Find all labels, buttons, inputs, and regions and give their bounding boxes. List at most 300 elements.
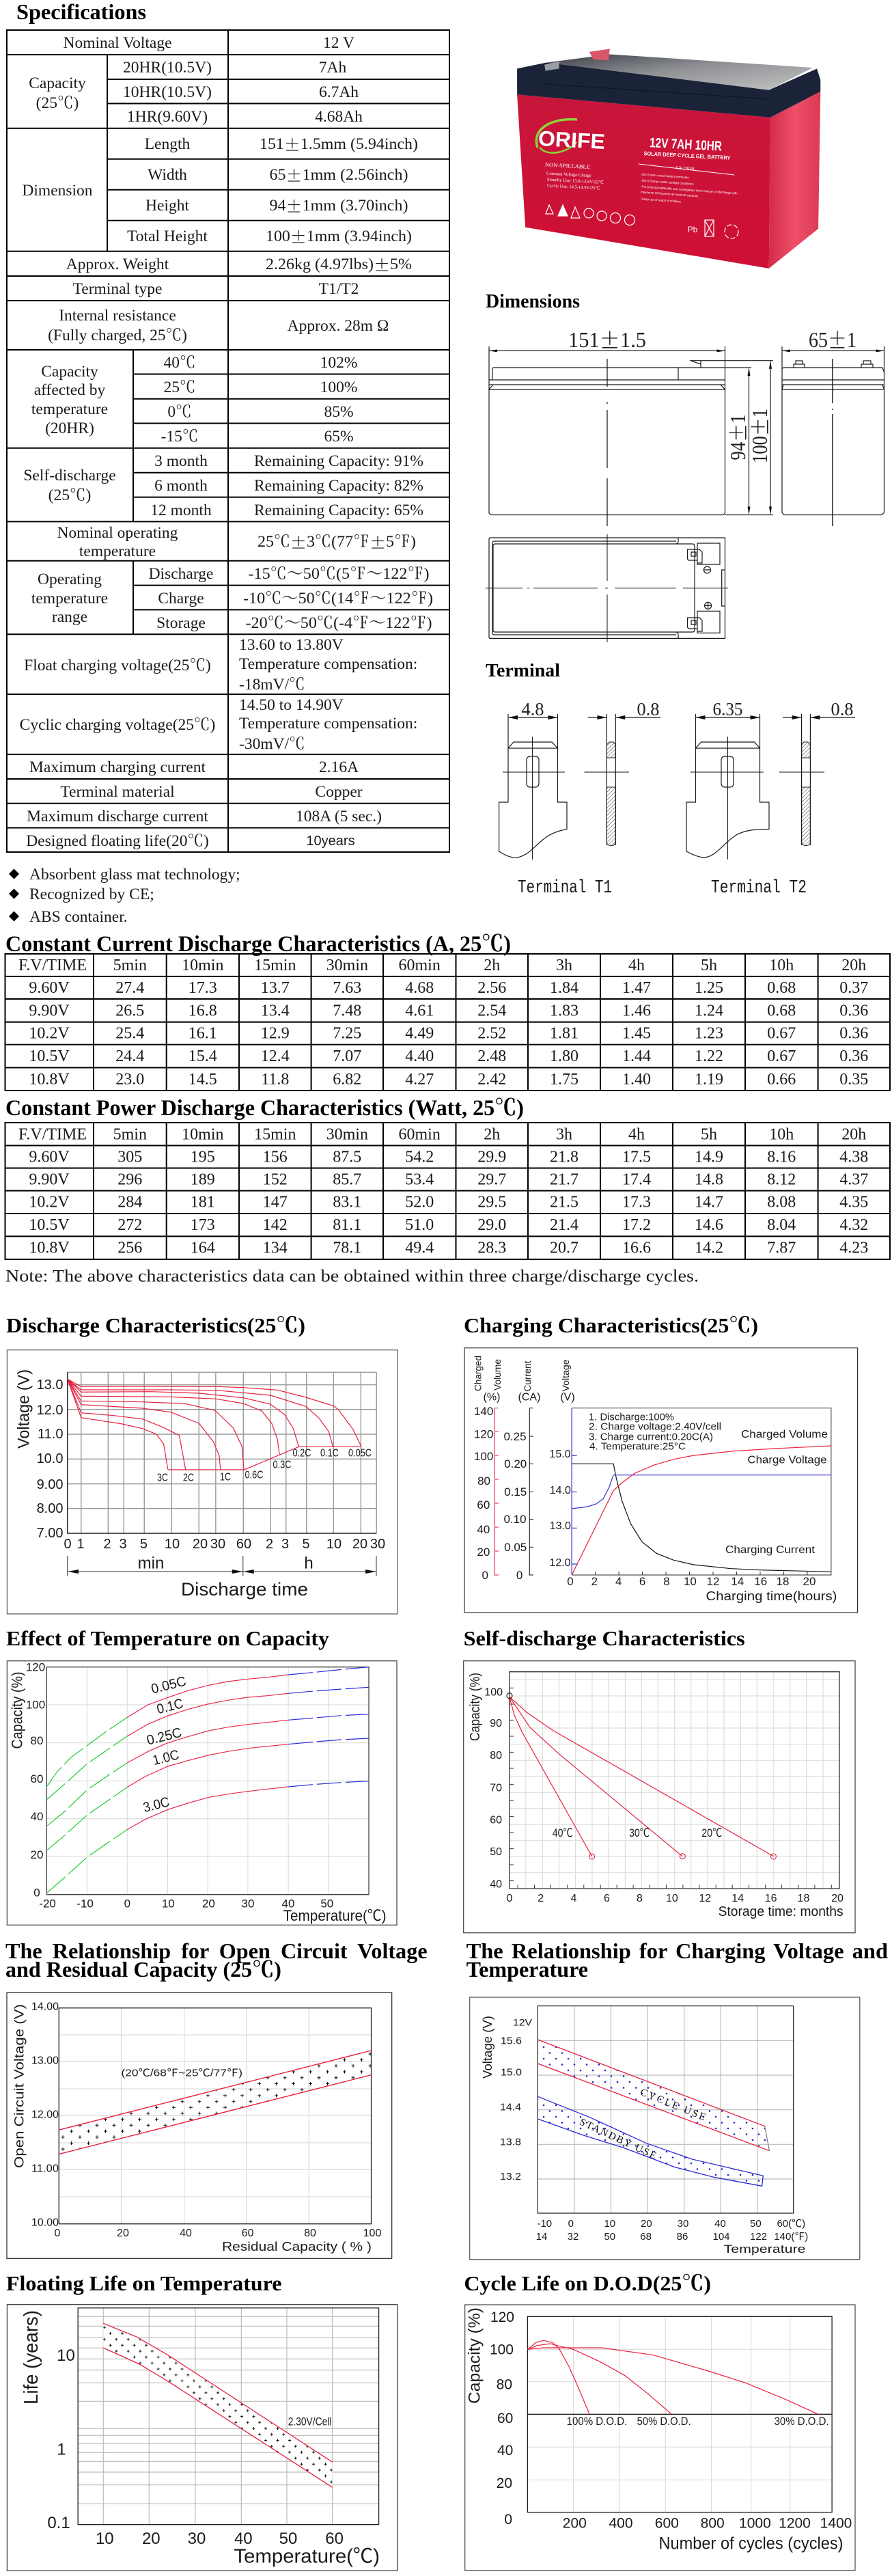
axis labels: 60 — [497, 2411, 513, 2426]
axis labels: 15.6 — [501, 2035, 522, 2047]
axis labels: 30 — [188, 2530, 206, 2547]
drawing: battery top view — [486, 534, 728, 642]
battery label text: CAUTION — [675, 166, 695, 172]
left axis labels: 13.0 — [550, 1520, 571, 1532]
axis labels: 20 — [202, 1897, 215, 1910]
table: constant power discharge: 2h — [484, 1126, 500, 1144]
table: constant current discharge: 2.54 — [477, 1002, 506, 1019]
axis labels: 0 — [506, 1893, 512, 1904]
left axis labels: 14.0 — [550, 1485, 571, 1496]
table: constant current discharge — [5, 954, 890, 1091]
table: constant power discharge: 15min — [254, 1126, 296, 1144]
table: specifications: Width — [148, 166, 187, 184]
table: constant power discharge: 14.8 — [695, 1171, 723, 1189]
x axis labels: 3 — [119, 1537, 127, 1552]
table: specifications: 85% — [324, 403, 354, 421]
table: constant current discharge: 1.83 — [550, 1002, 579, 1019]
left axis labels: 0.20 — [504, 1457, 527, 1470]
table: constant current discharge: 1.45 — [622, 1025, 651, 1043]
table: constant current discharge: 3h — [556, 957, 572, 974]
axis labels: 8 — [637, 1893, 643, 1904]
axis labels: 70 — [490, 1782, 502, 1794]
table: constant power discharge: 8.12 — [767, 1171, 796, 1189]
axis labels: 12.00 — [31, 2109, 59, 2121]
table: specifications: 12 V — [323, 34, 354, 52]
x axis labels: min — [138, 1554, 164, 1573]
x axis labels: 2 — [591, 1574, 598, 1588]
heading: open circuit voltage and residual capacity — [5, 1938, 428, 1982]
x axis labels: 10 — [165, 1537, 180, 1552]
table: constant current discharge: 60min — [399, 957, 441, 974]
axis labels — [20, 2310, 380, 2568]
curve labels: 2C — [183, 1472, 194, 1484]
table: specifications: 40℃ — [164, 354, 195, 372]
table: constant current discharge: 15min — [254, 957, 296, 974]
heading: Self-discharge Characteristics: Self-discharge Characteristics — [464, 1626, 745, 1650]
axis labels: 30 — [242, 1897, 254, 1910]
axis labels: 50 — [750, 2218, 762, 2229]
table: constant power discharge: 8.16 — [767, 1148, 796, 1166]
table: constant power discharge: 256 — [117, 1239, 142, 1257]
table: specifications: -18mV/℃ — [239, 676, 305, 694]
y axis labels: 13.0 — [37, 1378, 63, 1393]
x axis labels: 10 — [326, 1537, 342, 1552]
heading: Charging Characteristics: Charging Characteristics(25℃) — [464, 1313, 758, 1337]
heading: Specifications: Specifications — [16, 0, 146, 24]
cycle use band — [538, 2040, 769, 2151]
table: specifications: Cyclic charging voltage(25℃) — [20, 716, 215, 734]
table: specifications: Terminal type — [73, 280, 162, 298]
table: constant current discharge: 6.82 — [333, 1071, 361, 1088]
axis labels: 140(℉) — [774, 2230, 808, 2243]
axis labels: 14.4 — [500, 2102, 521, 2113]
table: constant current discharge: 0.68 — [767, 979, 796, 997]
temperature labels: 40℃ — [553, 1826, 573, 1839]
axis labels: 80 — [304, 2228, 316, 2238]
axis labels — [466, 2307, 852, 2553]
left axis labels: 0.15 — [504, 1485, 527, 1498]
x axis labels: 12 — [707, 1574, 719, 1588]
table: constant current discharge: 4h — [628, 957, 645, 974]
table: constant power discharge: 14.7 — [695, 1193, 723, 1211]
table: constant power discharge: 4.32 — [839, 1216, 868, 1234]
left axis labels: 40 — [477, 1523, 490, 1536]
table: constant current discharge: 7.48 — [333, 1002, 361, 1019]
left axis labels: 15.0 — [549, 1449, 571, 1460]
table: constant current discharge: 4.61 — [405, 1002, 434, 1019]
axis labels: 104 — [712, 2230, 730, 2243]
table: specifications: temperature — [31, 400, 108, 418]
table: constant power discharge: 7.87 — [767, 1239, 796, 1257]
table: specifications: 10years — [306, 834, 355, 849]
axis labels: 4 — [571, 1893, 577, 1904]
standby use band: STANDBY USE — [578, 2117, 658, 2162]
axis labels: 10 — [96, 2530, 114, 2547]
battery label text: Constant Voltage Charge — [546, 172, 591, 178]
table: specifications: Approx. 28m Ω — [288, 317, 389, 335]
feature bullet list: Absorbent glass mat technology; — [29, 866, 240, 883]
table: constant current discharge: 4.68 — [405, 979, 434, 997]
axis titles — [473, 1356, 575, 1403]
table: specifications: 102% — [320, 354, 357, 372]
dimension: height labels: 100±1 — [744, 409, 775, 463]
test condition notes: 3. Charge current:0.20C(A) — [589, 1431, 713, 1442]
axis labels: 20 — [497, 2476, 512, 2491]
table: specifications: Temperature compensation: — [239, 655, 417, 673]
table: constant power discharge: 8.08 — [767, 1193, 796, 1211]
left axis labels: 0 — [516, 1569, 522, 1582]
dimension: 4.8: 4.8 — [522, 700, 544, 719]
axis labels: 0.1 — [47, 2514, 70, 2532]
heading: Cycle Life on D.O.D: Cycle Life on D.O.D(25℃) — [464, 2271, 711, 2295]
table: constant current discharge: 27.4 — [115, 979, 144, 997]
x axis labels: 5 — [302, 1537, 310, 1552]
table: constant current discharge: 1.23 — [695, 1025, 723, 1043]
drawing: terminal T1 — [499, 700, 660, 899]
axis labels: 14 — [536, 2230, 547, 2243]
x axis labels: 6 — [639, 1574, 645, 1588]
table: specifications: Float charging voltage(25℃) — [24, 657, 211, 674]
table: constant current discharge: 11.8 — [261, 1071, 289, 1088]
x axis labels: Charging time(hours) — [706, 1589, 837, 1603]
table: constant power discharge: 173 — [191, 1216, 215, 1234]
table: constant power discharge: 83.1 — [333, 1193, 361, 1211]
axis labels: 100 — [26, 1699, 45, 1711]
axis labels: 13.2 — [500, 2171, 521, 2182]
charging current curve — [572, 1464, 831, 1572]
chart: discharge characteristics — [7, 1350, 398, 1614]
left axis labels: 100 — [474, 1450, 493, 1463]
axis labels: 1 — [57, 2441, 66, 2458]
x axis labels: 60 — [236, 1537, 251, 1552]
D.O.D labels: 50% D.O.D. — [637, 2415, 691, 2428]
axis labels: 20 — [117, 2228, 129, 2238]
x axis labels: 0 — [64, 1537, 72, 1552]
table: constant power discharge: 305 — [117, 1148, 142, 1166]
table: constant power discharge: 17.3 — [622, 1193, 651, 1211]
table: specifications: 14.50 to 14.90V — [239, 696, 344, 714]
test condition notes: 2. Charge voltage:2.40V/cell — [589, 1422, 721, 1433]
charge voltage curve — [572, 1475, 831, 1509]
table: constant power discharge: 195 — [191, 1148, 215, 1166]
table: constant power discharge: 17.5 — [622, 1148, 651, 1166]
table: constant current discharge: 30min — [326, 957, 368, 974]
table: constant current discharge: 2h — [484, 957, 500, 974]
heading: Discharge Characteristics: Discharge Characteristics(25℃) — [6, 1313, 305, 1337]
table: constant power discharge: 21.7 — [550, 1171, 579, 1189]
temperature labels: 20℃ — [701, 1826, 722, 1839]
axis labels: 10 — [604, 2218, 615, 2229]
drawing: battery front view — [489, 324, 773, 526]
table: constant current discharge: 10min — [182, 957, 223, 974]
test condition notes: 4. Temperature:25°C — [589, 1442, 686, 1453]
life band: 2.30V/Cell — [288, 2415, 331, 2428]
x axis labels: 8 — [663, 1574, 670, 1588]
table: specifications: (25℃) — [36, 94, 79, 112]
axis labels: 13.00 — [31, 2055, 59, 2066]
curve labels: 0.05C — [348, 1447, 372, 1460]
left axis labels: 0.05 — [504, 1541, 527, 1554]
axis labels: (20℃/68℉~25℃/77℉) — [122, 2068, 242, 2079]
axis titles: Charged — [473, 1356, 484, 1391]
table: constant power discharge: 10.2V — [29, 1193, 70, 1211]
table: constant current discharge: 0.37 — [839, 979, 868, 997]
table: specifications: Maximum discharge current — [27, 808, 208, 825]
axis labels: -10 — [537, 2218, 552, 2229]
table: specifications: 151±1.5mm (5.94inch) — [260, 133, 418, 156]
heading: open circuit voltage and residual capacity: The Relationship for Open Circuit Voltage — [5, 1938, 428, 1963]
table: constant current discharge: 1.84 — [550, 979, 579, 997]
axis labels: 50 — [320, 1897, 333, 1910]
axis labels: 60 — [31, 1772, 43, 1785]
table: constant current discharge: 1.75 — [550, 1071, 579, 1088]
heading: constant power discharge: Constant Power Discharge Characteristics (Watt, 25℃) — [5, 1096, 524, 1121]
table: constant current discharge: 1.47 — [622, 979, 651, 997]
x axis labels: 2 — [266, 1537, 273, 1552]
terminal T2 section: 0.8 — [831, 700, 854, 719]
table: specifications: -10℃～50℃(14℉～122℉) — [243, 590, 433, 607]
battery label text: ·For prolong batterylife and cyclingdays don't charge or discharge with — [641, 185, 738, 195]
axis labels: 10 — [57, 2346, 75, 2365]
test condition notes: 1. Discharge:100% — [589, 1412, 674, 1423]
battery label text: ·Keep out of reach of children — [641, 197, 682, 204]
y axis labels: 10.0 — [37, 1451, 63, 1466]
table: constant power discharge: 134 — [263, 1239, 288, 1257]
table: specifications: Internal resistance — [59, 307, 176, 325]
axis labels: 18 — [798, 1893, 810, 1904]
table: constant power discharge: 4h — [628, 1126, 645, 1144]
x axis labels: Discharge time — [181, 1579, 308, 1600]
table: specifications: Nominal Voltage — [63, 34, 172, 52]
axis labels: 0 — [504, 2512, 512, 2527]
table: specifications: 0℃ — [167, 403, 192, 421]
rate labels — [141, 1674, 188, 1815]
battery label text: SOLAR DEEP CYCLE GEL BATTERY — [643, 150, 731, 161]
table: constant power discharge: 10min — [182, 1126, 223, 1144]
heading: Dimensions: Dimensions — [486, 291, 580, 312]
chart: open circuit voltage vs residual capacity — [7, 1992, 392, 2258]
y axis labels: 8.00 — [37, 1501, 63, 1516]
heading: constant current discharge: Constant Current Discharge Characteristics (A, 25℃) — [5, 932, 511, 957]
table: constant power discharge: 9.90V — [29, 1171, 70, 1189]
axis titles: Voltage — [560, 1359, 571, 1391]
heading: Floating Life on Temperature: Floating Life on Temperature — [6, 2271, 281, 2295]
table: constant current discharge: 0.36 — [839, 1047, 868, 1065]
voltage band — [59, 2051, 372, 2154]
temperature labels — [553, 1826, 722, 1839]
table: specifications: Total Height — [127, 228, 208, 245]
heading: charging voltage and temperature — [466, 1938, 888, 1982]
curve labels — [725, 1429, 828, 1556]
table: constant power discharge: 14.9 — [695, 1148, 723, 1166]
icons: safety and recycling marks: Pb — [688, 225, 698, 234]
table: constant power discharge: 3h — [556, 1126, 572, 1144]
axis labels: 32 — [568, 2230, 579, 2243]
heading: charging voltage and temperature: Temperature — [466, 1957, 588, 1982]
axis labels — [12, 2001, 381, 2253]
table: specifications: -15℃～50℃(5℉～122℉) — [249, 565, 429, 583]
table: specifications: Designed floating life(20℃) — [26, 832, 209, 850]
test condition notes — [589, 1412, 721, 1453]
table: constant power discharge: 4.38 — [839, 1148, 868, 1166]
axis labels: 2 — [538, 1893, 544, 1904]
axis labels — [468, 1673, 844, 1919]
axis labels: 60 — [242, 2228, 254, 2238]
x axis labels: 20 — [803, 1574, 816, 1588]
table: constant power discharge: 49.4 — [405, 1239, 434, 1257]
table: specifications: 65% — [324, 428, 354, 446]
table: constant power discharge: 142 — [263, 1216, 288, 1234]
battery label text: Cyclic Use: 14.5-14.9V/25℃ — [547, 184, 601, 191]
table: specifications: 65±1mm (2.56inch) — [269, 163, 408, 187]
axis labels: 90 — [490, 1718, 502, 1729]
table: specifications: 3 month — [154, 452, 208, 470]
dimension: 65±1: 65±1 — [809, 324, 856, 355]
table: constant power discharge: 4.37 — [839, 1171, 868, 1189]
battery label text — [545, 135, 738, 204]
axis labels: Temperature — [724, 2243, 806, 2256]
table: constant power discharge: 81.1 — [333, 1216, 361, 1234]
battery label text: ·Don't short circuit battery terminals — [641, 173, 689, 179]
table: constant current discharge: 1.25 — [695, 979, 723, 997]
table: constant current discharge: 12.9 — [261, 1025, 290, 1043]
temperature labels: 30℃ — [629, 1826, 650, 1839]
axis labels: Residual Capacity ( % ) — [222, 2240, 372, 2253]
axis labels: 20 — [641, 2218, 652, 2229]
battery label text: 12V 7AH 10HR — [649, 135, 723, 154]
table: specifications: 1HR(9.60V) — [127, 108, 208, 126]
table: specifications — [7, 30, 449, 852]
dimension: 6.35: 6.35 — [713, 700, 743, 719]
table: specifications: Operating — [38, 571, 102, 588]
table: constant power discharge: 30min — [326, 1126, 368, 1144]
table: constant current discharge: 1.46 — [622, 1002, 651, 1019]
table: constant power discharge: 29.7 — [477, 1171, 506, 1189]
x axis labels: 1 — [76, 1537, 85, 1552]
table: specifications: temperature — [31, 590, 108, 607]
table: constant power discharge: 9.60V — [29, 1148, 70, 1166]
table: specifications: 13.60 to 13.80V — [239, 636, 344, 654]
axis labels: Storage time: months — [719, 1904, 844, 1919]
curve labels: Charge Voltage — [747, 1454, 826, 1466]
table: constant power discharge: F.V/TIME — [18, 1126, 87, 1144]
table: specifications: 100±1mm (3.94inch) — [266, 225, 412, 248]
x axis labels: 14 — [731, 1574, 744, 1588]
logo: ORIFE: ORIFE — [538, 126, 606, 154]
feature bullet list: ABS container. — [29, 908, 128, 926]
table: constant current discharge: 9.90V — [29, 1002, 70, 1019]
table: constant power discharge: 20h — [841, 1126, 866, 1144]
terminal T2 section — [779, 700, 855, 846]
x axis labels: 30 — [370, 1537, 385, 1552]
axis labels: -10 — [76, 1897, 94, 1910]
heading: open circuit voltage and residual capacity: and Residual Capacity (25℃) — [5, 1957, 281, 1982]
table: specifications: -15℃ — [161, 428, 198, 446]
table: specifications: Storage — [156, 614, 206, 632]
axis labels: 15.0 — [501, 2066, 522, 2079]
feature bullet list — [9, 866, 240, 926]
table: constant current discharge: 7.25 — [333, 1025, 361, 1043]
x axis labels: 20 — [193, 1537, 208, 1552]
table: constant power discharge: 296 — [117, 1171, 142, 1189]
dimension: 151±1.5: 151±1.5 — [568, 324, 646, 355]
left axis labels: 60 — [477, 1498, 490, 1511]
chart: effect of temperature on capacity — [7, 1660, 397, 1925]
x axis labels: 3 — [281, 1537, 289, 1552]
heading: Effect of Temperature on Capacity: Effect of Temperature on Capacity — [6, 1626, 330, 1650]
table: specifications: Self-discharge — [23, 467, 116, 484]
heading: Terminal: Terminal — [486, 659, 560, 681]
axis labels: 80 — [497, 2376, 512, 2393]
axis labels: 86 — [677, 2230, 688, 2243]
axis labels: 50 — [604, 2230, 615, 2243]
table: constant current discharge: 9.60V — [29, 979, 70, 997]
table: specifications: Remaining Capacity: 82% — [254, 477, 423, 495]
axis labels: 68 — [640, 2230, 652, 2243]
table: specifications: Capacity — [29, 74, 86, 92]
table: specifications: 6.7Ah — [319, 83, 359, 101]
table: constant power discharge: 16.6 — [622, 1239, 651, 1257]
chart: cycle life on depth of discharge — [465, 2305, 855, 2571]
axis labels: 6 — [604, 1893, 610, 1904]
axis labels: Open Circuit Voltage (V) — [12, 2004, 27, 2168]
table: specifications: Temperature compensation: — [239, 715, 417, 732]
table: constant current discharge: 24.4 — [115, 1047, 144, 1065]
table: specifications: Approx. Weight — [66, 256, 169, 273]
feature bullet list: Recognized by CE; — [29, 886, 154, 903]
y axis labels — [15, 1369, 63, 1541]
table: constant current discharge: 10.2V — [29, 1025, 70, 1043]
curve labels — [157, 1447, 372, 1484]
axis labels: 14 — [731, 1893, 744, 1904]
battery label text: ·Don't charge under sunlight conditions — [641, 179, 695, 186]
axis labels: 40 — [180, 2228, 192, 2238]
table: specifications: -20℃～50℃(-4℉～122℉) — [246, 614, 432, 632]
table: constant power discharge: 29.9 — [477, 1148, 506, 1166]
axis titles: (CA) — [518, 1391, 540, 1403]
table: specifications: 2.26kg (4.97lbs)±5% — [266, 253, 412, 276]
table: specifications: Dimension — [22, 182, 93, 200]
table: specifications: 10HR(10.5V) — [123, 83, 212, 101]
table: specifications: 20HR(10.5V) — [123, 59, 212, 77]
table: constant current discharge: 1.24 — [695, 1002, 723, 1019]
table: constant current discharge: 0.68 — [767, 1002, 796, 1019]
table: constant current discharge: 10.8V — [29, 1071, 70, 1088]
axis labels: 40 — [282, 1897, 294, 1910]
axis titles: Volume — [492, 1359, 503, 1390]
axis labels: 122 — [750, 2230, 767, 2243]
table: constant power discharge: 4.35 — [839, 1193, 868, 1211]
table: specifications: 7Ah — [319, 59, 346, 77]
axis labels: 20 — [142, 2530, 161, 2547]
table: constant power discharge: 147 — [263, 1193, 288, 1211]
table: constant current discharge: 13.4 — [261, 1002, 290, 1019]
table: constant current discharge: 4.40 — [405, 1047, 434, 1065]
battery label text: maximum 30%current all nominal capacity — [641, 191, 699, 197]
axis labels: Temperature(℃) — [234, 2546, 380, 2568]
y axis labels: 9.00 — [37, 1477, 63, 1492]
axis labels: 14.00 — [31, 2001, 59, 2013]
table: constant power discharge: 21.5 — [550, 1193, 579, 1211]
D.O.D labels: 100% D.O.D. — [567, 2415, 627, 2428]
self-discharge curves — [510, 1697, 773, 1856]
table: constant power discharge: 164 — [191, 1239, 215, 1257]
rate labels: 3.0C — [141, 1794, 171, 1815]
charged volume curve — [572, 1446, 831, 1575]
table: specifications: Discharge — [149, 565, 213, 583]
table: constant power discharge — [5, 1123, 890, 1259]
axis labels — [481, 2016, 808, 2256]
